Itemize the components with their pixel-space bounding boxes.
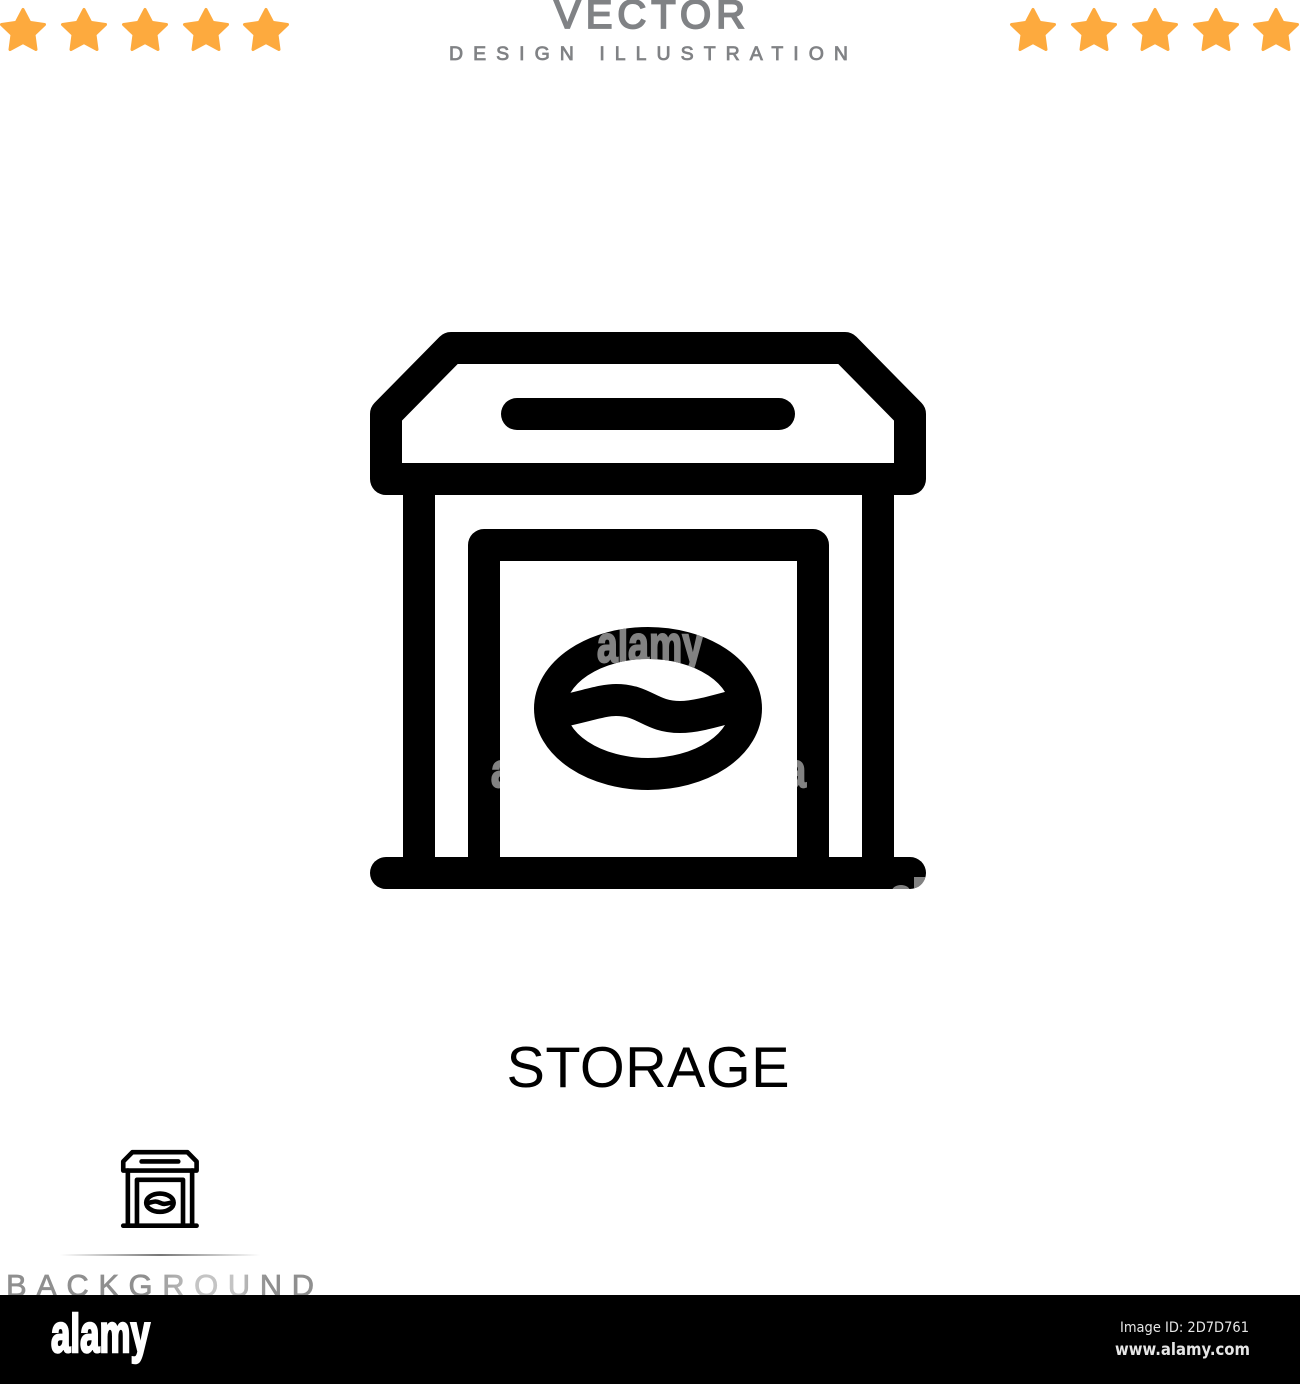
left rating stars xyxy=(2,10,288,50)
watermark fragment left: a xyxy=(491,745,513,798)
alamy logo: alamy xyxy=(51,1304,150,1364)
watermark on bean: alamy xyxy=(597,616,703,674)
door frame xyxy=(484,545,813,873)
coffee bean groove xyxy=(558,700,738,717)
subheading: DESIGN ILLUSTRATION: DESIGN ILLUSTRATION xyxy=(449,43,848,65)
image id: Image ID: 2D7D761 xyxy=(1120,1320,1249,1336)
icon: coffee storage box xyxy=(386,348,910,873)
right rating stars xyxy=(1012,10,1298,50)
footer bar xyxy=(0,1295,1300,1384)
website: www.alamy.com xyxy=(1115,1340,1250,1359)
box lid xyxy=(386,348,910,479)
lid slot xyxy=(517,398,779,430)
base bar xyxy=(386,857,910,889)
label: BACKGROUND: BACKGROUND xyxy=(6,1268,314,1303)
label: STORAGE: STORAGE xyxy=(506,1036,790,1100)
divider line xyxy=(60,1254,260,1256)
watermark fragment right: a xyxy=(786,745,806,798)
coffee bean outline xyxy=(550,643,746,774)
icon: small storage box thumbnail xyxy=(123,1152,197,1226)
watermark fragment on base bar xyxy=(892,877,926,897)
side posts xyxy=(419,479,878,873)
